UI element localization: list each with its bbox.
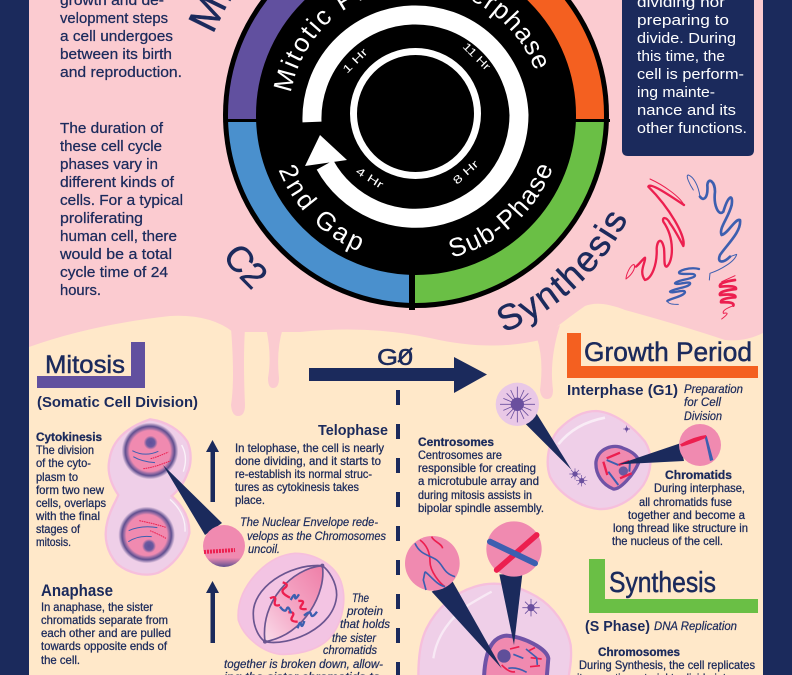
protein caption: the sister (332, 631, 377, 645)
duration text block: different kinds of (60, 175, 175, 191)
label: Sub-Phase: Sub-Phase (450, 165, 552, 256)
chromatids text: During interphase, (654, 481, 745, 495)
duration text block (59, 121, 183, 299)
outer label: Synthesis: Synthesis (498, 212, 626, 330)
DNA strands illustration (626, 175, 740, 319)
telophase text (235, 422, 388, 507)
S phase subheading: DNA Replication (654, 619, 737, 633)
duration text block: The duration of (60, 121, 164, 137)
duration text block: would be a total (59, 247, 172, 263)
cytokinesis text: mitosis. (36, 535, 71, 549)
ring segment: sub-phase green (415, 122, 604, 303)
G0 description box: other functions. (637, 121, 747, 137)
pink drips (231, 325, 560, 416)
cytokinesis text: of the cyto- (36, 456, 91, 470)
protein caption: that holds (340, 617, 390, 631)
duration text block: human cell, there (60, 229, 177, 245)
anaphase text: towards opposite ends of (41, 639, 168, 653)
up arrow: anaphase (206, 581, 219, 643)
protein caption: chromatids (323, 643, 377, 657)
chromosome thread zoom with pointer (405, 536, 502, 668)
telophase text: In telophase, the cell is nearly (235, 441, 384, 455)
G0 description box: this time, the (637, 49, 725, 65)
illustration: interphase cell (548, 411, 650, 509)
label: 2nd Gap: 2nd Gap (278, 165, 362, 252)
cytokinesis text: The division (36, 443, 94, 457)
duration text block: these cell cycle (60, 139, 162, 155)
intro text block: and reproduction. (60, 65, 182, 81)
G0 description box (622, 0, 754, 156)
S phase subheading: (S Phase) (585, 618, 650, 635)
outer label: C2: C2 (227, 246, 266, 290)
nuclear envelope caption: velops as the Chromosomes (247, 529, 386, 543)
chromatids text: all chromatids fuse (639, 495, 732, 509)
centrosomes text: bipolar spindle assembly. (418, 501, 544, 515)
duration: 8 Hr: 8 Hr (451, 158, 482, 187)
duration text block: cycle time of 24 (60, 265, 168, 281)
Synthesis heading (589, 559, 758, 613)
telophase text: Telophase (318, 422, 388, 439)
G0 description box: nance and its (637, 103, 736, 119)
protein caption: The (352, 591, 369, 605)
anaphase text: each other and are pulled (41, 626, 171, 640)
cytokinesis text: Cytokinesis (36, 430, 102, 444)
duration text block: hours. (60, 283, 101, 299)
cytokinesis text (35, 430, 106, 549)
cytokinesis text: stages of (36, 522, 81, 536)
inner white ring (354, 52, 478, 176)
Synthesis heading: Synthesis (609, 567, 716, 599)
Interphase subheading (567, 382, 743, 423)
centrosomes text (418, 435, 544, 515)
duration: 1 Hr: 1 Hr (341, 46, 371, 76)
G0 description box: divide. During (637, 31, 736, 47)
anaphase text: chromatids separate from (41, 613, 168, 627)
chromosomes text: During Synthesis, the cell replicates (579, 658, 755, 672)
cytokinesis text: form two new (36, 483, 104, 497)
chromosomes text: Chromosomes (598, 645, 680, 659)
Interphase subheading: Preparation (684, 382, 743, 396)
nuclear envelope caption (240, 515, 386, 556)
Growth Period heading: Growth Period (584, 337, 752, 367)
telophase text: place. (235, 493, 265, 507)
right navy side band (763, 0, 792, 675)
chromatids text: together and become a (628, 508, 745, 522)
cytokinesis text: plasm to (36, 470, 78, 484)
anaphase text: Anaphase (41, 581, 113, 600)
centrosomes text: responsible for creating (418, 461, 536, 475)
intro text block: velopment steps (60, 11, 168, 27)
illustration: synthesis cell (418, 584, 571, 675)
intro text block (60, 0, 182, 81)
cream lower background (29, 304, 763, 675)
centrosomes text: during mitosis assists in (418, 488, 532, 502)
protein caption (224, 591, 390, 675)
ring segment: mitotic purple (228, 0, 305, 119)
crossed chromosome zoom with pointer (486, 521, 542, 645)
chromatids text (612, 468, 748, 548)
cell cycle wheel (223, 0, 610, 310)
ring segment: interphase orange (527, 0, 604, 119)
Interphase subheading: for Cell (684, 395, 721, 409)
white progress arc with arrow (305, 15, 519, 218)
intro text block: a cell undergoes (60, 29, 173, 45)
centrosomes text: a microtubule array and (418, 474, 539, 488)
G0 arrow (309, 357, 487, 393)
cytokinesis text: cells, overlaps (36, 496, 106, 510)
centrosomes text: Centrosomes (418, 435, 494, 449)
anaphase text (41, 581, 171, 667)
duration: 11 Hr: 11 Hr (460, 41, 493, 73)
telophase text: re-establish its normal struc- (235, 467, 372, 481)
protein caption: protein (346, 604, 383, 618)
Growth Period heading (567, 333, 758, 378)
chromatids text: long thread like structure in (613, 521, 748, 535)
Mitosis heading (37, 342, 145, 388)
protein caption: together is broken down, allow- (224, 657, 383, 671)
chromatid zoom with pointer (618, 424, 721, 466)
centrosome zoom with pointer (496, 383, 572, 470)
telophase text: tures as cytokinesis takes (235, 480, 359, 494)
duration text block: proliferating (60, 211, 143, 227)
duration text block: cells. For a typical (60, 193, 183, 209)
chromosomes text (577, 645, 755, 675)
nuclear envelope caption: uncoil. (248, 542, 280, 556)
telophase text: done dividing, and it starts to (235, 454, 381, 468)
intro text block: between its birth (60, 47, 172, 63)
G0 description box: ing mainte- (637, 85, 715, 101)
up arrow: telophase (206, 440, 219, 502)
S phase subheading (585, 618, 737, 635)
pointer: nuclear envelope zoom (163, 465, 245, 567)
G0 description box: cell is perform- (637, 67, 744, 83)
Interphase subheading: Division (684, 409, 722, 423)
left navy side band (0, 0, 29, 675)
anaphase text: In anaphase, the sister (41, 600, 153, 614)
nuclear envelope caption: The Nuclear Envelope rede- (240, 515, 378, 529)
chromatids text: Chromatids (665, 468, 732, 482)
duration text block: phases vary in (60, 157, 158, 173)
centrosomes text: Centrosomes are (418, 448, 502, 462)
illustration: anaphase cell (238, 553, 344, 654)
Interphase subheading: Interphase (G1) (567, 382, 678, 399)
cytokinesis text: with the final (35, 509, 100, 523)
anaphase text: the cell. (41, 653, 80, 667)
G0 description box: preparing to (637, 13, 729, 29)
G0 label: G0 (377, 344, 413, 370)
illustration: dividing cell (106, 419, 191, 575)
Mitosis heading: Mitosis (45, 351, 125, 379)
duration: 4 Hr: 4 Hr (353, 165, 386, 192)
chromatids text: the nucleus of the cell. (612, 534, 723, 548)
ring segment: 2nd gap blue (228, 122, 409, 303)
Somatic Cell Division subheading: (Somatic Cell Division) (37, 394, 198, 411)
